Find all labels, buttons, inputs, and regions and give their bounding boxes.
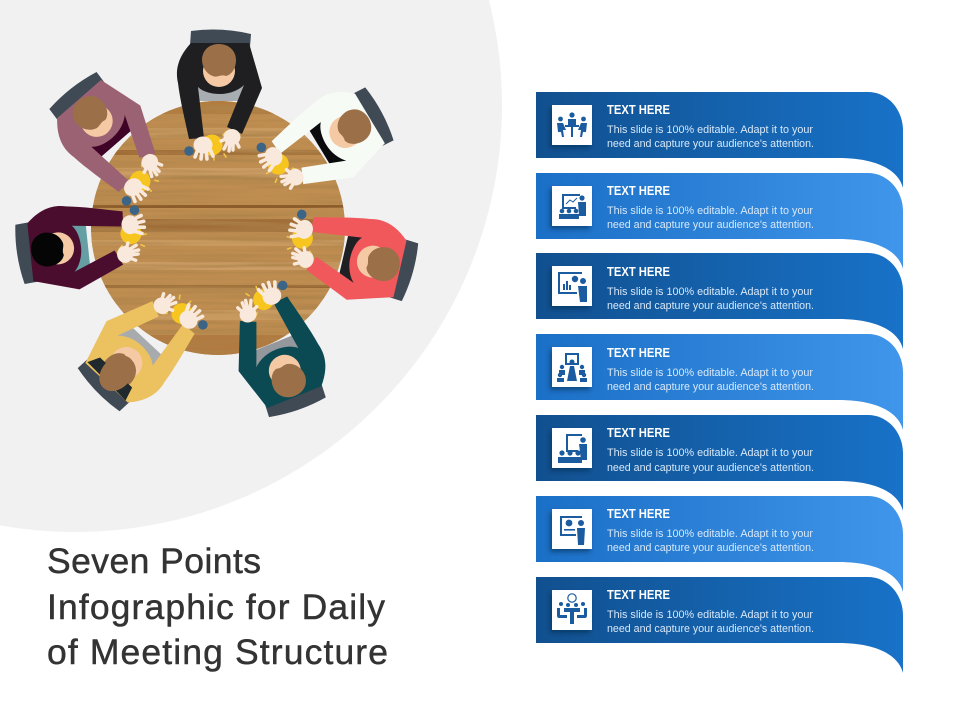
banner 7 — [536, 577, 903, 673]
person: red jacket — [277, 201, 423, 313]
person: mauve jacket — [38, 61, 188, 216]
banner 3: need and capture your audience's attention. — [607, 300, 814, 312]
background circle — [0, 0, 502, 532]
title — [47, 541, 388, 672]
banner 1: This slide is 100% editable. Adapt it to your — [607, 124, 813, 136]
banner 6: need and capture your audience's attention. — [607, 542, 814, 554]
icon: trainer with seated group — [552, 428, 592, 468]
banner 6 — [536, 496, 903, 592]
banner 1: need and capture your audience's attention. — [607, 138, 814, 150]
banner 5: TEXT HERE — [607, 425, 670, 440]
wooden table — [91, 100, 345, 355]
person: black jacket at top — [177, 30, 262, 160]
icon: presenter at chart board — [552, 266, 592, 306]
banner 4: need and capture your audience's attention. — [607, 381, 814, 393]
person: teal jacket — [212, 273, 339, 425]
banner 3 — [536, 253, 903, 349]
icon: presenter with audience — [552, 186, 592, 226]
person: yellow jacket — [67, 269, 218, 422]
person: white jacket — [247, 75, 403, 215]
banner 7: TEXT HERE — [607, 587, 670, 602]
banner 4: TEXT HERE — [607, 345, 670, 360]
icon: boardroom table — [552, 347, 592, 387]
banner 2: This slide is 100% editable. Adapt it to your — [607, 205, 813, 217]
banner 6: TEXT HERE — [607, 506, 670, 521]
banner 5 — [536, 415, 903, 511]
icon: meeting around table — [552, 105, 592, 145]
banner 2: TEXT HERE — [607, 183, 670, 198]
banner 4 — [536, 334, 903, 430]
banner 1 — [536, 92, 903, 188]
banner 1: TEXT HERE — [607, 102, 670, 117]
banner 5: This slide is 100% editable. Adapt it to your — [607, 447, 813, 459]
banner 2: need and capture your audience's attention. — [607, 219, 814, 231]
icon: presenter with pie chart board — [552, 509, 592, 549]
banner 7: need and capture your audience's attention. — [607, 623, 814, 635]
banner 6: This slide is 100% editable. Adapt it to your — [607, 528, 813, 540]
title: of Meeting Structure — [47, 632, 388, 672]
banner 4: This slide is 100% editable. Adapt it to your — [607, 367, 813, 379]
banner 7: This slide is 100% editable. Adapt it to your — [607, 609, 813, 621]
banner 3: This slide is 100% editable. Adapt it to your — [607, 286, 813, 298]
person: maroon jacket — [12, 197, 151, 295]
title: Infographic for Daily — [47, 587, 385, 627]
banner 5: need and capture your audience's attention. — [607, 462, 814, 474]
banner 2 — [536, 173, 903, 269]
title: Seven Points — [47, 541, 261, 581]
icon: meeting with clock — [552, 590, 592, 630]
banner 3: TEXT HERE — [607, 264, 670, 279]
